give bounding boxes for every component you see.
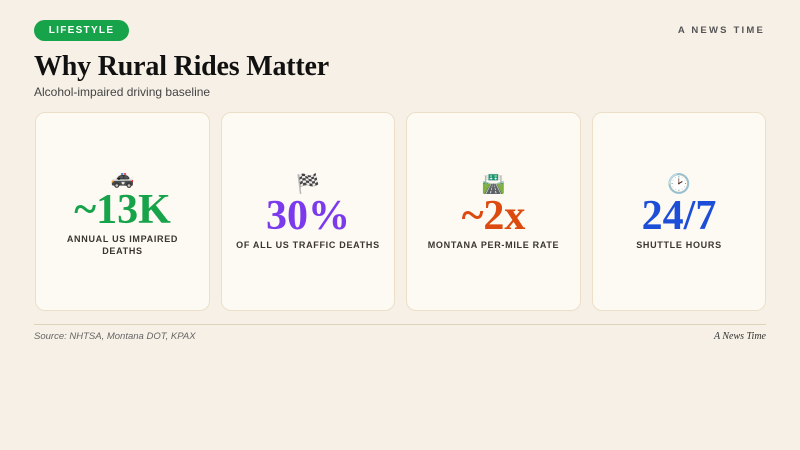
subtitle: Alcohol-impaired driving baseline	[34, 85, 210, 99]
label: ANNUAL US IMPAIRED DEATHS	[67, 234, 178, 256]
tag: lifestyle: LIFESTYLE	[49, 25, 114, 36]
label: SHUTTLE HOURS	[636, 240, 722, 250]
title: Why Rural Rides Matter	[34, 51, 329, 82]
panel: shuttle hours	[592, 112, 766, 311]
signature: A News Time	[714, 331, 766, 342]
tag: lifestyle	[34, 20, 129, 41]
icon: police car: 🚓	[111, 166, 134, 188]
brand: A NEWS TIME	[678, 25, 765, 36]
panel: traffic deaths	[221, 112, 395, 311]
label: MONTANA PER-MILE RATE	[428, 240, 559, 250]
source: Source: NHTSA, Montana DOT, KPAX	[34, 331, 196, 342]
panel: montana rate	[406, 112, 581, 311]
icon: clock: 🕑	[667, 172, 691, 194]
label: OF ALL US TRAFFIC DEATHS	[236, 240, 380, 250]
panel: impaired deaths	[35, 112, 210, 311]
stat: ~13K	[74, 186, 171, 232]
stat: ~2x	[462, 192, 525, 238]
stat: 24/7	[642, 192, 716, 238]
icon: road: 🛣️	[482, 172, 505, 194]
icon: flag: 🏁	[296, 172, 320, 194]
stat: 30%	[266, 192, 350, 238]
